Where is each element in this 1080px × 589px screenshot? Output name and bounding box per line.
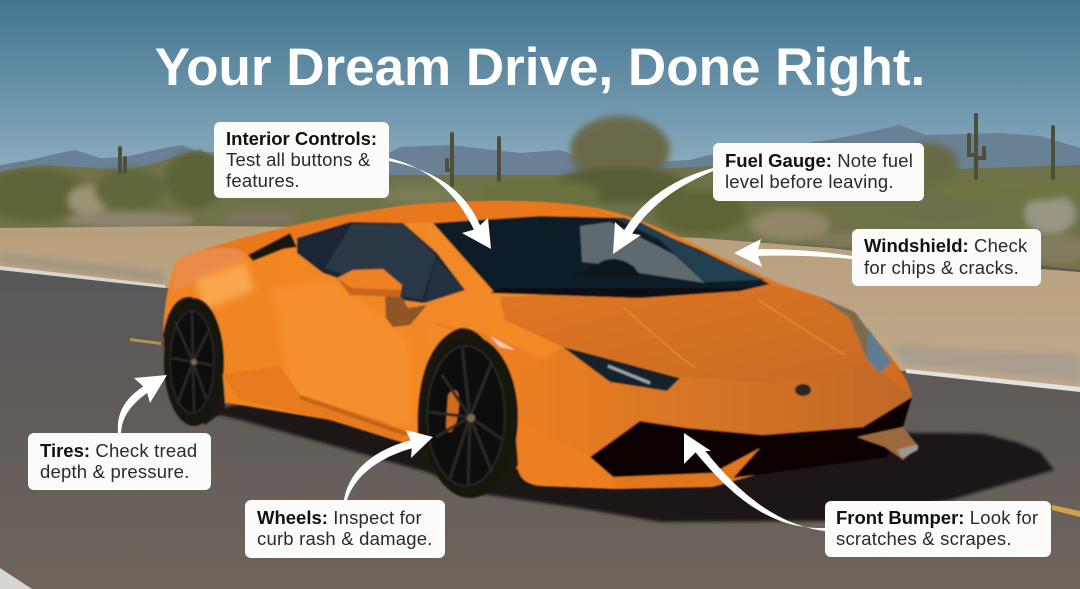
background: gravel strip: [0, 254, 1080, 382]
side window: [297, 222, 465, 303]
side mirror: [385, 295, 427, 327]
lamborghini badge: [795, 384, 811, 396]
arrow: fuel gauge: [613, 168, 713, 254]
callout: windshield: Windshield: Check: [864, 235, 1028, 256]
callout: fuel gauge: [713, 143, 924, 201]
background: saguaro cacti: [120, 115, 1053, 185]
callout: tires: Tires: Check tread: [40, 440, 197, 461]
right splitter: [857, 427, 919, 460]
callout: tires: [28, 433, 211, 490]
callout: front bumper: scratches & scrapes.: [836, 528, 1012, 549]
callout: wheels: curb rash & damage.: [257, 528, 433, 549]
car shadow: [205, 390, 1054, 522]
rear intake slot: [248, 233, 297, 261]
callout: windshield: [852, 229, 1041, 286]
arrow: tires: [118, 375, 167, 433]
arrow: wheels: [344, 430, 433, 500]
right fender reflection: [820, 297, 868, 360]
right headlight: [867, 328, 892, 373]
rear haunch: [172, 248, 248, 292]
callout: fuel gauge: level before leaving.: [725, 171, 894, 192]
door panel highlight: [272, 280, 410, 430]
background: desert sky: [0, 0, 1080, 180]
car: orange sports car: [163, 201, 919, 498]
background: distant mountains: [0, 125, 1080, 190]
background: desert scrub: [0, 116, 1080, 270]
callout: wheels: [245, 500, 445, 558]
front air intake: [590, 397, 912, 478]
background: asphalt road: [0, 268, 1080, 589]
arrow: windshield: [734, 239, 852, 267]
rear wheel: [164, 298, 224, 426]
callout: interior controls: Interior Controls:: [226, 128, 377, 149]
callout: fuel gauge: Fuel Gauge: Note fuel: [725, 150, 913, 171]
callout: interior controls: Test all buttons &: [226, 149, 371, 170]
road markings: [0, 266, 1080, 589]
left headlight: [563, 347, 680, 391]
arrow: front bumper: [684, 433, 825, 531]
callout: front bumper: Front Bumper: Look for: [836, 507, 1038, 528]
callout: tires: depth & pressure.: [40, 461, 189, 482]
arrow: interior controls: [389, 158, 491, 249]
front wheel: [422, 336, 518, 498]
front splitter: [613, 448, 760, 488]
car roof highlight: [205, 201, 625, 258]
callout: interior controls: [214, 122, 389, 198]
front fender: [425, 320, 640, 489]
hood: [500, 285, 867, 383]
title: Your Dream Drive, Done Right.: [155, 38, 925, 97]
road texture: [0, 395, 1080, 589]
car body: [163, 201, 912, 489]
callout: wheels: Wheels: Inspect for: [257, 507, 422, 528]
hood creases: [623, 300, 845, 367]
indicator: [490, 336, 515, 350]
callout: windshield: for chips & cracks.: [864, 257, 1019, 278]
callout: front bumper: [825, 501, 1051, 557]
callout: interior controls: features.: [226, 170, 300, 191]
side skirt: [222, 366, 410, 444]
windshield: [433, 216, 770, 298]
front wheel arch: [417, 328, 518, 480]
background: dirt shoulder: [0, 226, 1080, 392]
rear wheel arch: [163, 297, 225, 425]
rear side vent: [249, 371, 285, 400]
bumper: [505, 347, 912, 457]
